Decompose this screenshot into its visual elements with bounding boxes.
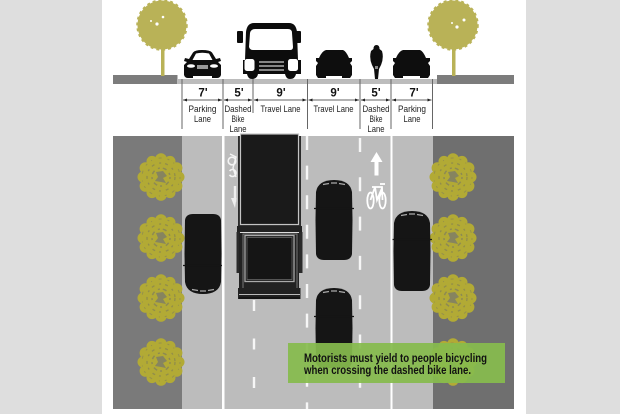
lane width labels: Lane [404, 114, 420, 125]
lane width labels [188, 88, 426, 135]
lane width labels: Lane [368, 124, 384, 135]
icon: right elevation tree [428, 0, 478, 76]
lane width labels: Lane [194, 114, 211, 125]
bus plan view [236, 134, 302, 299]
icon: rear view car, parking lane [393, 50, 430, 78]
lane dashes [254, 136, 360, 409]
right street trees [430, 153, 476, 386]
dimension ticks and arrows [182, 79, 432, 129]
cross-section: street profile [113, 75, 514, 84]
callout [288, 343, 505, 383]
icon: left elevation tree [137, 0, 187, 76]
lane width labels: 5' [371, 88, 381, 100]
lane width labels: 9' [276, 88, 286, 100]
left parked car, facing down [183, 214, 223, 294]
lane width labels: Lane [230, 124, 246, 135]
middle car in travel lane [314, 180, 354, 260]
icon: rear view car, travel lane [316, 50, 352, 78]
lane width labels: Bike [370, 114, 382, 125]
lane width labels: 7' [198, 88, 208, 100]
callout: when crossing the dashed bike lane. [303, 365, 471, 377]
white lane lines [222, 136, 392, 409]
roadway band [178, 79, 437, 84]
left street trees [138, 153, 184, 386]
lane width labels: 7' [409, 88, 419, 100]
plan view: road surface [113, 136, 514, 409]
right parked car [392, 211, 432, 291]
icon: dashed lane bike marking, upside down [228, 154, 236, 177]
lane width labels: Dashed [224, 104, 252, 115]
icon: cyclist rear view [370, 45, 383, 79]
lane width labels: 5' [234, 88, 244, 100]
icon: down arrow marking [231, 186, 236, 208]
lane width labels: Parking [398, 104, 426, 115]
lane width labels: Travel Lane [260, 104, 300, 115]
lane width labels: Bike [232, 114, 244, 125]
icon: up arrow marking [370, 152, 382, 176]
lane width labels: Travel Lane [314, 104, 354, 115]
right sidewalk [437, 75, 514, 84]
icon: front view bus [237, 23, 301, 79]
lane width labels: Parking [188, 104, 216, 115]
lower car in travel lane [314, 288, 354, 368]
icon: bike lane symbol [367, 184, 386, 208]
lane width labels: Dashed [362, 104, 390, 115]
left sidewalk [113, 75, 178, 84]
lane width labels: 9' [330, 88, 340, 100]
icon: front view car with windshield [184, 50, 221, 78]
callout: Motorists must yield to people bicycling [304, 353, 487, 365]
